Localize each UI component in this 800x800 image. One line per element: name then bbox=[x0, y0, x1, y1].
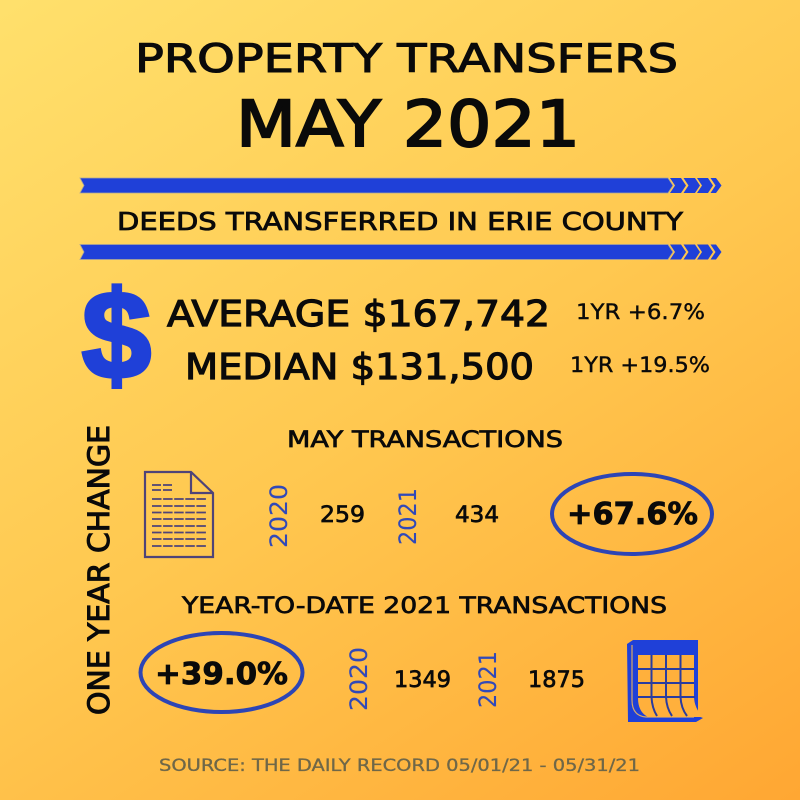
average price bbox=[167, 294, 705, 335]
may 2021 count bbox=[394, 488, 499, 545]
may 2020 count: 259 bbox=[320, 503, 365, 528]
ytd 2020 count: 1349 bbox=[394, 668, 451, 693]
ytd 2021 count: 2021 bbox=[474, 651, 502, 708]
arrow banner: bottom bbox=[80, 244, 722, 260]
heading: may transactions: MAY TRANSACTIONS bbox=[287, 428, 563, 453]
callout: may change: +67.6% bbox=[567, 497, 698, 532]
source note: SOURCE: THE DAILY RECORD 05/01/21 - 05/31/21 bbox=[159, 756, 640, 776]
subheading: DEEDS TRANSFERRED IN ERIE COUNTY bbox=[117, 207, 684, 236]
title: MAY 2021 bbox=[236, 88, 580, 161]
arrow banner: top bbox=[80, 178, 722, 193]
callout: year-to-date change bbox=[140, 633, 302, 712]
median price: MEDIAN $131,500 bbox=[185, 347, 534, 388]
ytd 2020 count bbox=[345, 647, 451, 711]
side label: one year change: ONE YEAR CHANGE bbox=[82, 425, 116, 715]
average price: AVERAGE $167,742 bbox=[167, 294, 550, 335]
callout: may change bbox=[552, 474, 712, 554]
icon: document bbox=[145, 472, 213, 557]
may 2021 count: 434 bbox=[455, 503, 499, 528]
median price bbox=[185, 347, 710, 388]
may 2020 count: 2020 bbox=[265, 484, 293, 548]
ytd 2020 count: 2020 bbox=[345, 647, 373, 711]
may 2020 count bbox=[265, 484, 365, 548]
callout: year-to-date change: +39.0% bbox=[155, 657, 288, 692]
heading: year-to-date transactions: YEAR-TO-DATE 2021 TRANSACTIONS bbox=[181, 594, 667, 619]
ytd 2021 count bbox=[474, 651, 585, 708]
average price: 1YR +6.7% bbox=[576, 300, 705, 324]
median price: 1YR +19.5% bbox=[570, 353, 710, 377]
icon: dollar sign: $ bbox=[82, 267, 151, 405]
icon: calendar bbox=[627, 640, 703, 722]
may 2021 count: 2021 bbox=[394, 488, 422, 545]
title: PROPERTY TRANSFERS bbox=[135, 37, 678, 82]
title bbox=[135, 37, 678, 161]
ytd 2021 count: 1875 bbox=[528, 668, 585, 693]
